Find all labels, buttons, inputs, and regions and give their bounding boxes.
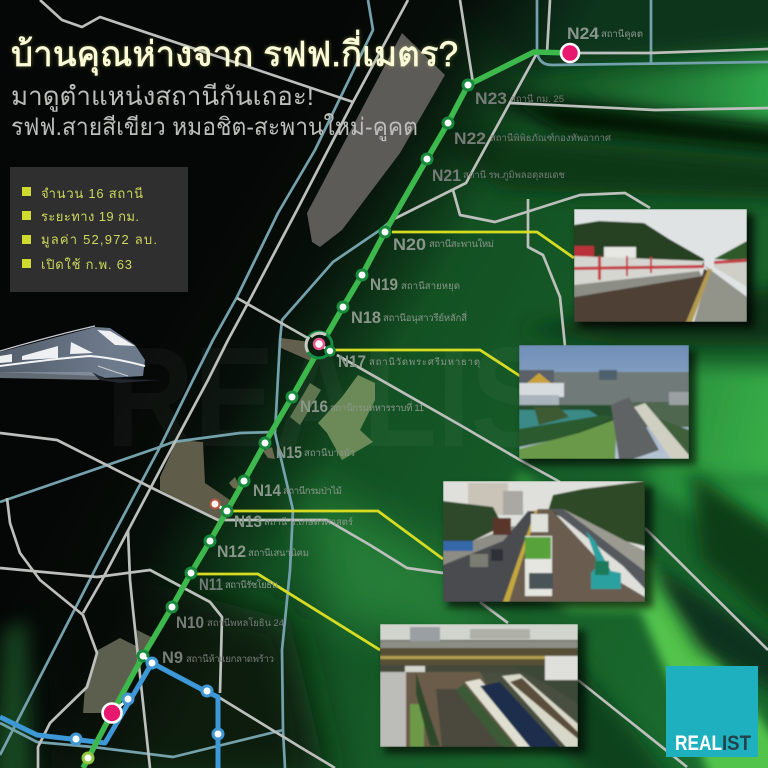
photo: construction beside road at Saphan Mai (574, 209, 754, 328)
interchange: N13 (210, 500, 227, 511)
photo: station architectural model (380, 624, 586, 754)
map: blue line (0, 663, 218, 768)
subtitle: มาดูตำแหน่งสถานีกันเถอะ! (11, 81, 314, 112)
station labels: N20 (393, 235, 426, 254)
station labels: สถานีห้าแยกลาดพร้าว (186, 653, 274, 665)
station labels: N15 (276, 443, 302, 462)
bullet list: จำนวน 16 สถานี (41, 186, 143, 201)
station labels: สถานีเสนานิคม (248, 547, 309, 559)
station labels: N16 (300, 397, 328, 416)
station labels: สถานีกรมทหารราบที่ 11 (330, 401, 424, 414)
stations: blue line (71, 656, 223, 744)
bullet list: มูลค่า 52,972 ลบ. (41, 232, 157, 248)
station labels: สถานีพิพิธภัณฑ์กองทัพอากาศ (490, 132, 611, 144)
icon: high speed train (0, 326, 160, 383)
station labels: N19 (370, 275, 398, 294)
station labels: สถานีพหลโยธิน 24 (207, 617, 284, 629)
terminal marker: N24 (561, 44, 579, 62)
bullet list: ระยะทาง 19 กม. (41, 209, 139, 224)
station labels: สถานีอนุสาวรีย์หลักสี่ (383, 311, 467, 324)
bullet list (22, 186, 157, 272)
logo: REALIST: IST (722, 732, 751, 755)
station labels: N12 (217, 542, 246, 561)
station labels (162, 24, 643, 667)
logo: REALIST: REAL (675, 732, 722, 755)
station labels: N22 (454, 129, 486, 148)
station labels: N23 (475, 89, 507, 108)
station labels: N11 (199, 575, 223, 594)
photo: road works with excavator (443, 481, 653, 608)
route name: รฟฟ.สายสีเขียว หมอชิต-สะพานใหม่-คูคต (11, 113, 418, 142)
station labels: N13 (234, 512, 262, 531)
title: บ้านคุณห่างจาก รฟฟ.กี่เมตร? (11, 30, 458, 75)
station labels: สถานีบางบัว (304, 447, 355, 459)
station labels: สถานีวัดพระศรีมหาธาตุ (369, 356, 480, 368)
terminal marker: Mo Chit interchange (102, 704, 122, 722)
title block: บ้านคุณห่างจาก รฟฟ.กี่เมตร? (11, 30, 458, 75)
map: land blocks (83, 33, 445, 713)
station labels: N14 (253, 481, 281, 500)
watermark: REALIST: REALIST (106, 318, 626, 477)
station labels: N18 (351, 308, 381, 327)
logo: REALIST (666, 666, 758, 757)
station labels: สถานี ม.เกษตรศาสตร์ (264, 516, 353, 528)
station labels: N24 (567, 24, 600, 43)
station labels: N21 (432, 166, 461, 185)
station labels: N10 (176, 613, 204, 632)
map: yellow leader lines (195, 232, 574, 650)
station labels: สถานีกรมป่าไม้ (283, 485, 342, 497)
info panel (10, 167, 188, 292)
station labels: N17 (338, 352, 366, 371)
station labels: สถานี รพ.ภูมิพลอดุลยเดช (463, 169, 566, 181)
bullet list: เปิดใช้ ก.พ. 63 (41, 257, 132, 272)
map: green line (83, 52, 570, 768)
station labels: สถานี กม. 25 (510, 93, 564, 105)
stations: green line (83, 80, 473, 763)
station labels: สถานีสะพานใหม่ (429, 238, 494, 250)
station labels: สถานีคูคต (601, 28, 643, 40)
station labels: สถานีรัชโยธิน (225, 579, 278, 591)
interchange: N17 (306, 332, 334, 358)
station labels: สถานีสายหยุด (401, 280, 460, 292)
title block (11, 30, 458, 142)
station labels: N9 (162, 648, 183, 667)
photo: aerial view of Wat Phra Sri Mahathat (519, 345, 696, 465)
